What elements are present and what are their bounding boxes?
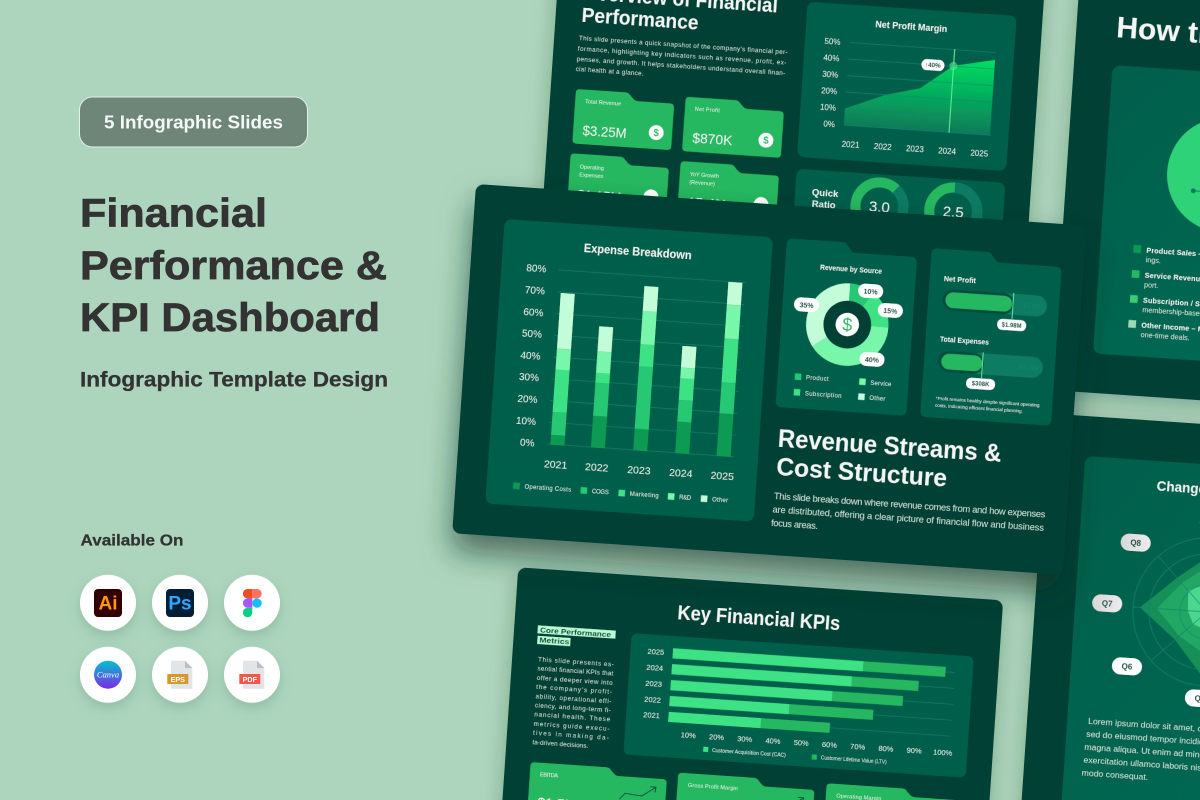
axis label: Q6 (1111, 657, 1143, 676)
icon: eps file: EPS (171, 675, 185, 684)
icon: illustrator: Ai (98, 594, 118, 614)
legend: subscription (1129, 295, 1200, 322)
overview description: This slide presents a quick snapshot of the company's financial per- (579, 35, 788, 56)
y axis labels: 10% (516, 416, 536, 428)
icon: growth arrow (619, 785, 656, 800)
slide description: focus areas. (771, 518, 818, 531)
kpi description: the company's profit- (536, 684, 612, 696)
card: total revenue: $ (653, 128, 660, 139)
callout: 15% (877, 303, 903, 318)
panel: net profit margin area chart (797, 2, 1017, 171)
card: operating expenses (567, 153, 669, 214)
overview description: penses, and growth. It helps stakeholders understand overall finan- (576, 56, 785, 77)
callout: 40%: 40% (865, 357, 880, 365)
bar: 2023: 2023 (645, 679, 662, 689)
legend: service revenue: port. (1144, 280, 1159, 290)
x axis labels: 50% (793, 738, 809, 748)
y axis labels: 40% (823, 53, 840, 63)
main title: KPI Dashboard (80, 296, 380, 340)
y axis labels: 10% (820, 103, 836, 113)
axis label: Q7 (1092, 594, 1123, 613)
bar: 2021: 2021 (643, 710, 660, 720)
axis label: Q8: Q8 (1130, 538, 1142, 548)
kpi description: ability, operational effi- (535, 693, 612, 705)
x axis labels: 2022 (585, 461, 609, 475)
kpi description: ciency, and long-term fi- (535, 702, 611, 714)
legend: service revenue (1131, 270, 1200, 297)
x axis labels: 2021 (841, 140, 860, 150)
slide: revenue streams and cost structure (452, 184, 1087, 575)
icon: pdf file (224, 647, 280, 703)
slide title: kpis: Key Financial KPIs (677, 602, 841, 635)
card: ebitda: EBITDA (540, 772, 558, 779)
slide: how the revenue works (1052, 0, 1200, 417)
icon: dollar: $ (842, 315, 853, 335)
kpi description: nancial health. These (534, 711, 611, 724)
legend: COGS (592, 489, 609, 496)
card: net profit: Net Profit (695, 107, 720, 115)
axis label: Q7: Q7 (1102, 599, 1113, 609)
donut legend: Other (869, 396, 885, 403)
card: ebitda (527, 762, 667, 800)
panel: expense breakdown chart: Expense Breakdown (583, 243, 692, 262)
bar: 2022: 2022 (644, 694, 661, 705)
y axis labels (514, 263, 547, 450)
panel: quick ratio: Quick (812, 187, 839, 200)
x axis labels: 90% (906, 746, 922, 756)
y axis labels: 20% (821, 86, 837, 96)
callout: 35% (794, 297, 819, 313)
card: net profit (682, 97, 784, 158)
kpi description: offer a deeper view into (537, 675, 613, 687)
panel: quick ratio (789, 167, 1005, 293)
legend: product sales: ings. (1146, 255, 1161, 265)
panel: expense breakdown chart (485, 219, 773, 522)
slide title: revenue streams: Revenue Streams & (777, 425, 1002, 468)
kpi description: sential financial KPIs that (537, 666, 614, 678)
slide: changes radar (1007, 413, 1200, 800)
kpi description: metrics guide execu- (533, 721, 610, 733)
icon: illustrator (80, 575, 136, 631)
x axis labels: 80% (878, 744, 894, 754)
legend: Marketing (630, 492, 659, 500)
legend: other income: one-time deals. (1140, 330, 1190, 342)
card: total revenue: $3.25M (582, 122, 627, 141)
x axis labels: 2024 (938, 146, 957, 157)
card: yoy growth: YoY Growth (690, 172, 719, 180)
bar: 2024 (646, 662, 919, 691)
card: operating expenses: Expenses (579, 172, 604, 180)
slide description: This slide breaks down where revenue comes from and how expenses (774, 491, 1046, 520)
x axis labels: 60% (822, 740, 838, 750)
pie chart (1163, 114, 1200, 236)
donut legend: Product (806, 376, 829, 383)
legend: ltv: Customer Lifetime Value (LTV) (821, 755, 887, 766)
highlighted subheading: Metrics (539, 636, 570, 647)
y axis labels (819, 37, 841, 129)
callout: 15%: 15% (883, 308, 898, 316)
highlighted subheading (537, 625, 616, 650)
radar polygons (1128, 533, 1200, 691)
axis label: Q5 (1184, 689, 1200, 708)
y axis labels: 80% (526, 263, 547, 276)
panel: net profit margin area chart: Net Profit Margin (875, 19, 948, 35)
x axis labels: 20% (709, 732, 725, 742)
icon: canva: Canva (97, 670, 119, 680)
bar: 2025 (647, 647, 946, 677)
slide title: revenue streams: Cost Structure (775, 453, 948, 493)
legend: other income (1127, 320, 1200, 346)
callout: 40%: ↑40% (925, 62, 941, 70)
axis label: Q6: Q6 (1121, 662, 1133, 672)
callout: 10%: 10% (863, 288, 879, 296)
callout: 10% (858, 283, 884, 299)
overview description: formance, highlighting key indicators such as revenue, profit, ex- (578, 46, 787, 67)
slide title: overview: Performance (581, 5, 699, 35)
slide description (771, 491, 1046, 546)
donut legend: Service (870, 381, 892, 388)
area series (844, 50, 995, 135)
main title: Performance & (80, 244, 387, 288)
icon: eps file (152, 647, 208, 703)
net profit progress bar (940, 274, 1049, 333)
legend: product sales (1133, 245, 1200, 273)
slide title: revenue streams (775, 425, 1002, 496)
donut legend (793, 373, 892, 403)
legend: R&D (679, 495, 692, 502)
x axis labels: 40% (765, 736, 781, 746)
bar: 2024: 2024 (646, 663, 663, 673)
total expenses progress bar: $308K (971, 381, 990, 389)
y axis labels: 70% (524, 285, 545, 297)
bar: 2025: 2025 (647, 647, 664, 657)
card: total revenue (572, 89, 675, 150)
y axis labels: 0% (520, 438, 535, 450)
legend: cac: Customer Acquisition Cost (CAC) (712, 748, 786, 759)
card: operating expenses: Operating (580, 164, 604, 172)
kpi description: ta-driven decisions. (532, 739, 589, 750)
kpi description (532, 656, 615, 751)
x axis labels: 2023 (627, 464, 651, 478)
card: total revenue: Total Revenue (585, 99, 621, 108)
panel: revenue pie (1093, 65, 1200, 374)
x axis labels: 10% (680, 730, 696, 740)
legend: Operating Costs (524, 485, 571, 494)
main title: Financial (80, 192, 267, 236)
card: operating margin (823, 783, 963, 800)
card: yoy growth: 15.4% (687, 194, 728, 213)
slide: overview of financial performance (536, 0, 1048, 332)
card: net profit: $870K (692, 130, 734, 148)
bar: 2022 (644, 694, 873, 720)
stacked bar: 2021 (550, 293, 575, 446)
panel: revenue by source donut: Revenue by Source (820, 263, 882, 276)
kpi description: This slide presents es- (538, 656, 614, 669)
x axis labels: 2025 (710, 470, 734, 483)
legend (513, 482, 728, 504)
badge: 5 infographic slides: 5 Infographic Slides (104, 112, 283, 132)
donut chart (813, 290, 882, 359)
subtitle: Infographic Template Design (80, 369, 388, 392)
net profit progress bar: Net Profit (944, 274, 977, 285)
available on heading: Available On (80, 532, 184, 549)
radar description: modo consequat. (1081, 768, 1148, 782)
badge: 5 infographic slides (80, 97, 308, 147)
callout: 40% (859, 352, 885, 367)
stacked bar: 2025 (717, 282, 742, 457)
x axis labels: 2023 (906, 144, 925, 154)
x axis labels: 2022 (874, 142, 892, 152)
highlighted subheading: Core Performance (540, 625, 611, 639)
axis label: Q8 (1120, 533, 1151, 552)
panel: profit and expenses progress (920, 248, 1062, 426)
y axis labels: 50% (522, 329, 542, 341)
panel: quick ratio: Ratio (811, 199, 836, 211)
card: gross profit margin: Gross Profit Margin (688, 783, 738, 792)
main title (80, 192, 387, 340)
total expenses progress bar: Total Expenses (940, 334, 989, 347)
y axis labels: 20% (517, 394, 538, 406)
x axis labels: 100% (933, 747, 953, 758)
icon: photoshop (152, 575, 208, 631)
y axis labels: 50% (824, 37, 841, 47)
panel: kpi bar chart (623, 633, 974, 778)
y axis labels: 0% (823, 120, 835, 129)
panel: revenue by source donut (776, 238, 918, 416)
footnote (935, 396, 1040, 415)
stacked bar: 2022 (591, 326, 613, 448)
legend: Other (712, 497, 728, 504)
x axis labels: 70% (850, 742, 866, 752)
slide title: overview (581, 0, 779, 40)
radar description (1081, 716, 1200, 792)
overview description (575, 35, 788, 87)
gauge: 2.5: 2.5 (942, 203, 964, 222)
icon: figma (224, 575, 280, 631)
footnote: costs, indicating efficient financial planning. (935, 403, 1023, 414)
x axis labels: 2021 (544, 458, 568, 472)
callout: 40% (921, 59, 945, 71)
icon: canva (80, 647, 136, 703)
x axis labels: 2025 (970, 148, 989, 159)
icon: growth arrow (767, 795, 804, 800)
card: yoy growth (677, 161, 780, 222)
x axis labels: 2024 (669, 467, 693, 480)
donut legend: Subscription (805, 391, 842, 400)
bar: 2021 (643, 710, 830, 733)
y axis labels: 30% (519, 372, 539, 384)
stacked bar: 2023 (633, 286, 658, 451)
panel: radar chart (1057, 456, 1200, 800)
icon: pdf file: PDF (243, 675, 258, 684)
y axis labels: 40% (520, 350, 541, 363)
card: yoy growth: (Revenue) (689, 180, 715, 188)
callout: 35%: 35% (799, 302, 814, 310)
total expenses progress bar (936, 334, 1045, 394)
stacked bar: 2024 (675, 346, 696, 454)
card: operating expenses: $1.15M (577, 186, 622, 205)
y axis labels: 30% (822, 70, 839, 80)
x axis labels: 30% (737, 734, 753, 744)
net profit progress bar: $3.25M (1023, 303, 1043, 311)
card: net profit: $ (763, 136, 769, 147)
gauge: 3.0 (843, 170, 915, 242)
axis label: Q1 (1199, 513, 1200, 532)
gauge: 3.0: 3.0 (868, 198, 890, 217)
slide: key financial kpis (497, 567, 1003, 800)
overview description: cial health at a glance. (575, 66, 644, 78)
footnote: *Profit remains healthy despite significant operating (936, 396, 1040, 408)
slide description: are distributed, offering a clear picture of financial flow and business (772, 504, 1045, 533)
x axis labels (680, 730, 953, 758)
kpi description: tives in making da- (533, 730, 609, 742)
bar: 2023 (645, 678, 903, 706)
x axis labels (544, 458, 734, 483)
net profit progress bar: $1.98M (1001, 322, 1022, 330)
card: gross profit margin (674, 773, 815, 800)
icon: photoshop: Ps (168, 594, 192, 614)
gauge: 2.5 (928, 186, 979, 237)
total expenses progress bar: $3.25M (1019, 365, 1039, 372)
y axis labels: 60% (523, 307, 544, 319)
x axis labels (841, 140, 989, 159)
